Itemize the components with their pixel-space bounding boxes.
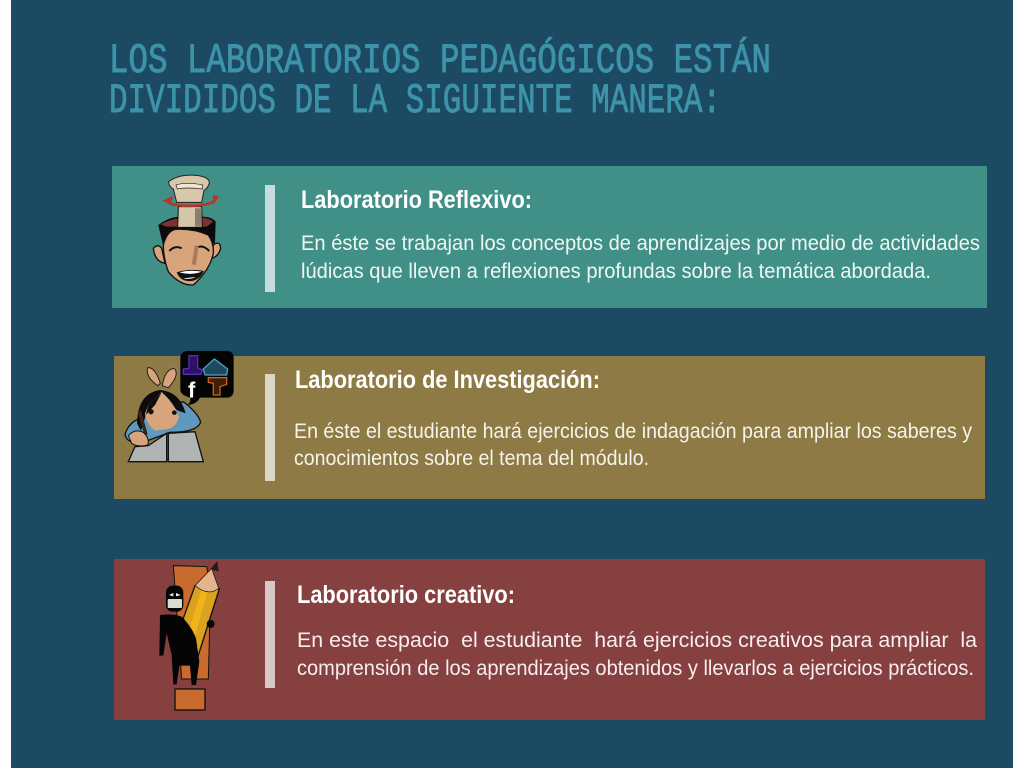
panel: laboratorio de investigación <box>114 351 985 499</box>
icon: exclamation mark with pencil figure <box>159 561 219 710</box>
panel: laboratorio reflexivo <box>112 166 987 308</box>
text block: En este espacio el estudiante hará ejercicios creativos para ampliar la <box>297 629 977 652</box>
heading: Laboratorio creativo: <box>297 581 515 609</box>
text block: lúdicas que lleven a reflexiones profundas sobre la temática abordada. <box>301 260 931 283</box>
heading: Laboratorio Reflexivo: <box>301 186 532 214</box>
title <box>109 36 771 125</box>
text block: En éste el estudiante hará ejercicios de indagación para ampliar los saberes y <box>294 420 972 443</box>
title: DIVIDIDOS DE LA SIGUIENTE MANERA: <box>109 77 721 125</box>
heading: Laboratorio de Investigación: <box>295 366 600 394</box>
divider bar <box>265 185 275 292</box>
icon: head with scroll <box>153 175 221 285</box>
text block <box>301 232 980 283</box>
text block <box>294 420 972 470</box>
divider bar <box>265 374 275 481</box>
title: LOS LABORATORIOS PEDAGÓGICOS ESTÁN <box>109 36 771 85</box>
panel: laboratorio creativo <box>114 559 985 720</box>
text block: En éste se trabajan los conceptos de aprendizajes por medio de actividades <box>301 232 980 255</box>
text block <box>297 629 977 680</box>
divider bar <box>265 581 275 688</box>
speech bubble: f <box>188 378 196 403</box>
text block: comprensión de los aprendizajes obtenidos y llevarlos a ejercicios prácticos. <box>297 657 974 680</box>
icon: student with book and speech bubble <box>125 351 234 462</box>
text block: conocimientos sobre el tema del módulo. <box>294 447 649 470</box>
